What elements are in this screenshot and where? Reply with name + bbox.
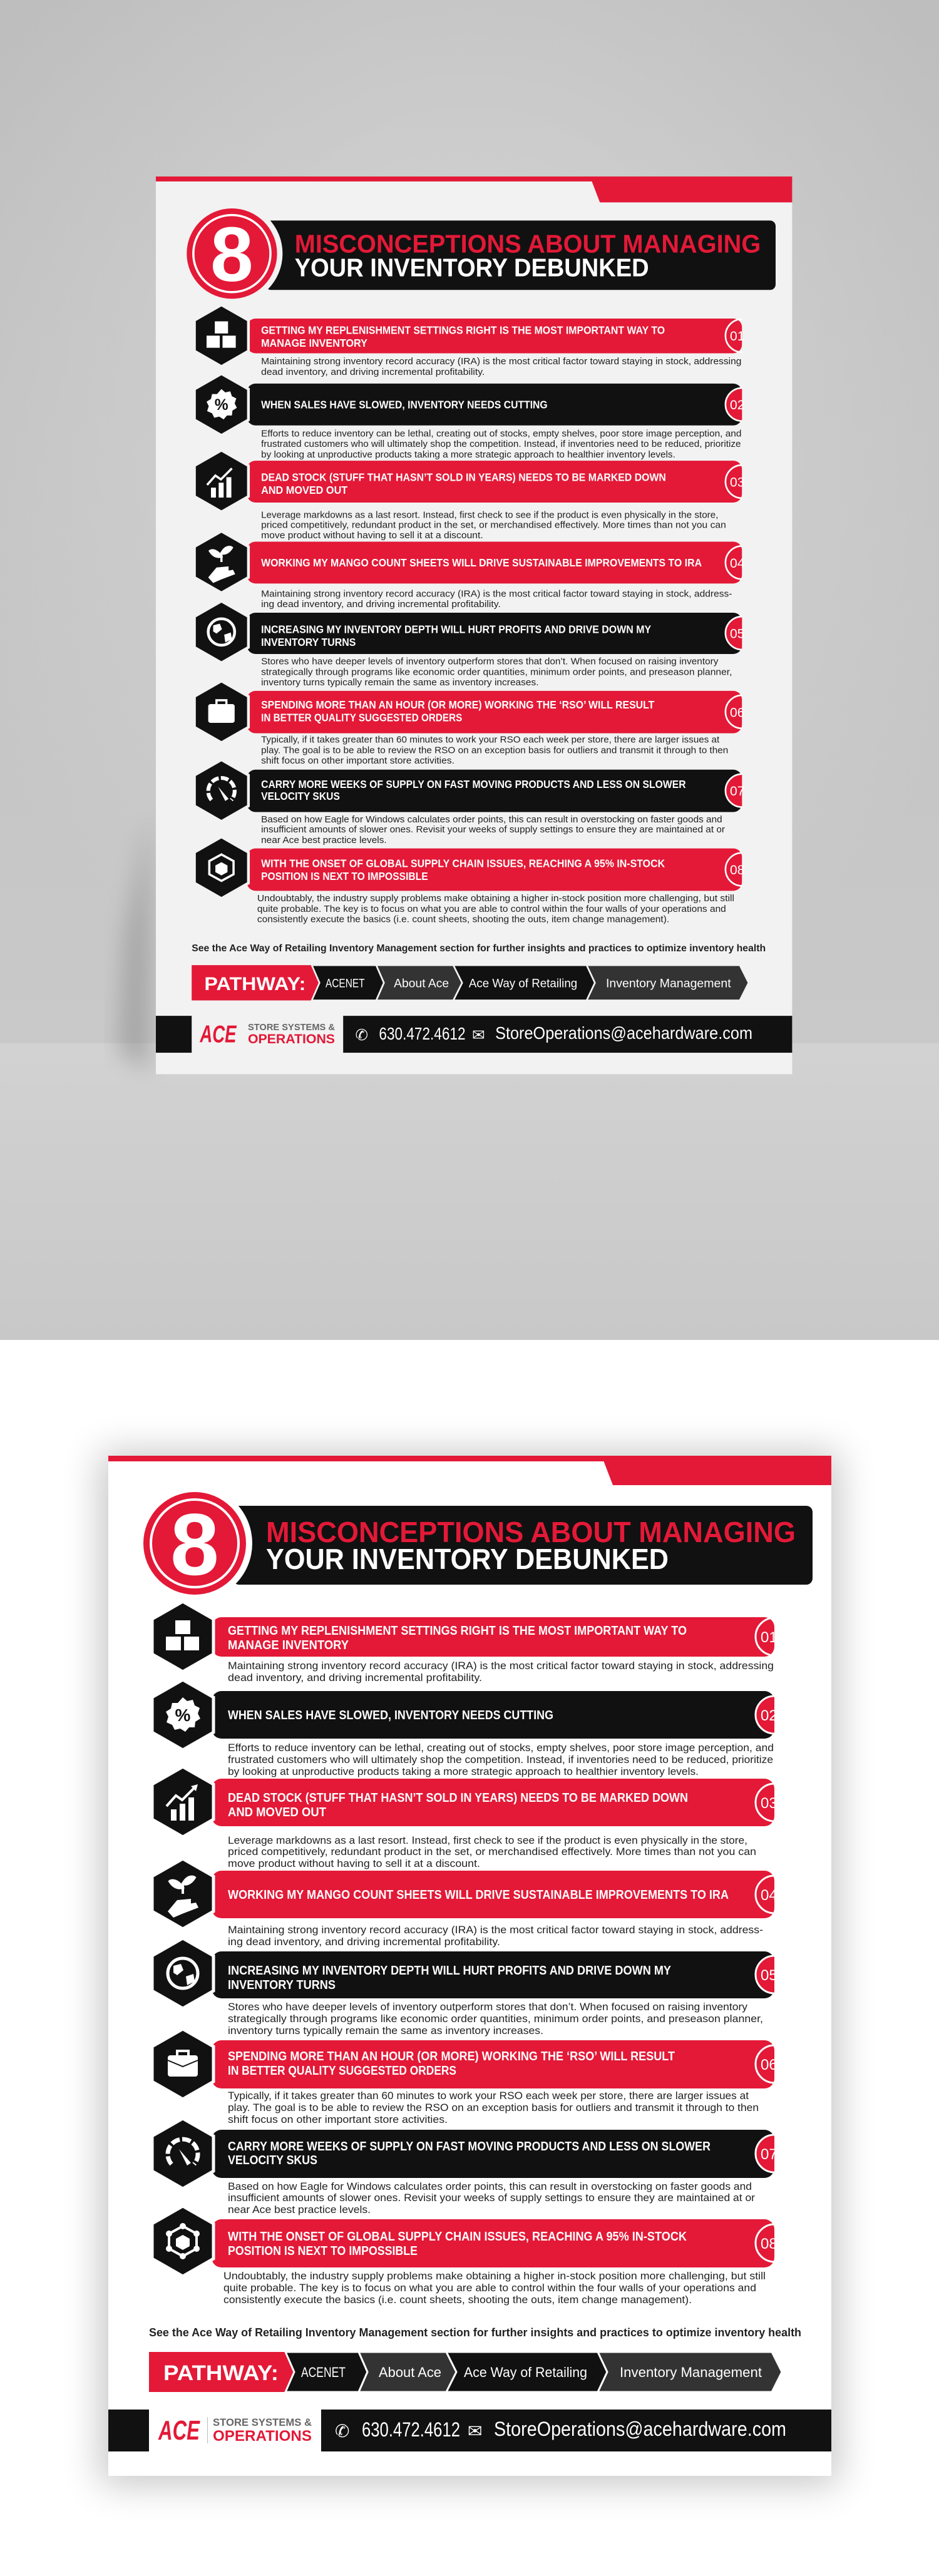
- item 03: move product without having to sell it at a discount.: [228, 1858, 480, 1869]
- item 08: 08: [761, 2236, 777, 2252]
- pathway breadcrumb: Inventory Management: [620, 2364, 762, 2380]
- mockup poster (angled copy): Ace Way of Retailing: [469, 976, 577, 990]
- mockup poster (angled copy): INCREASING MY INVENTORY DEPTH WILL HURT PROFITS AND DRIVE DOWN MY: [261, 623, 651, 636]
- pathway breadcrumb: [149, 2352, 782, 2392]
- title banner with number 8: MISCONCEPTIONS ABOUT MANAGING: [266, 1516, 796, 1548]
- mockup poster (angled copy): StoreOperations@acehardware.com: [495, 1023, 752, 1043]
- mockup poster (angled copy): 01: [730, 329, 744, 344]
- item 07: [152, 2119, 799, 2216]
- footer: logo and contact: STORE SYSTEMS &: [213, 2416, 312, 2428]
- title banner with number 8: 8: [170, 1495, 219, 1593]
- item 08: WITH THE ONSET OF GLOBAL SUPPLY CHAIN ISSUES, REACHING A 95% IN-STOCK: [228, 2230, 687, 2244]
- item 06: IN BETTER QUALITY SUGGESTED ORDERS: [228, 2064, 456, 2078]
- icon: globe: [168, 1958, 198, 1988]
- footer: logo and contact: [108, 2410, 831, 2451]
- item 04: ing dead inventory, and driving incremental profitability.: [228, 1936, 500, 1948]
- mockup poster (angled copy): [156, 176, 792, 1074]
- footer: logo and contact: StoreOperations@acehardware.com: [494, 2418, 786, 2440]
- mockup poster (angled copy): INVENTORY TURNS: [261, 636, 356, 648]
- item 06: shift focus on other important store activities.: [228, 2113, 448, 2125]
- mockup poster (angled copy): WITH THE ONSET OF GLOBAL SUPPLY CHAIN ISSUES, REACHING A 95% IN-STOCK: [261, 857, 665, 870]
- item 07: VELOCITY SKUS: [228, 2154, 317, 2167]
- item 02: [152, 1680, 799, 1777]
- footer: logo and contact: ✆: [335, 2421, 349, 2441]
- mockup poster (angled copy): 03: [730, 475, 744, 489]
- mockup poster (angled copy): ACENET: [326, 976, 365, 990]
- item 01: [152, 1602, 799, 1684]
- mockup poster (angled copy): VELOCITY SKUS: [261, 790, 340, 802]
- mockup poster (angled copy): 02: [730, 398, 744, 412]
- item 05: [152, 1938, 799, 2037]
- item 04: [152, 1859, 799, 1948]
- mockup poster (angled copy): Leverage markdowns as a last resort. Instead, first check to see if the product is even physically in the store,: [261, 510, 718, 521]
- item 08: [152, 2206, 799, 2306]
- item 03: DEAD STOCK (STUFF THAT HASN’T SOLD IN YEARS) NEEDS TO BE MARKED DOWN: [228, 1791, 688, 1805]
- icon: percent badge: %: [175, 1705, 191, 1725]
- mockup poster (angled copy): %: [215, 397, 228, 414]
- icon: percent badge: [166, 1697, 200, 1732]
- item 08: quite probable. The key is to focus on what you are able to control within the four walls of your operations and: [223, 2282, 756, 2294]
- pathway breadcrumb: PATHWAY:: [163, 2361, 279, 2385]
- item 04: Maintaining strong inventory record accuracy (IRA) is the most critical factor toward staying in stock, address-: [228, 1924, 763, 1936]
- mockup poster (angled copy): shift focus on other important store activities.: [261, 755, 454, 766]
- item 03: AND MOVED OUT: [228, 1806, 326, 1819]
- mockup poster (angled copy): move product without having to sell it at a discount.: [261, 530, 483, 541]
- item 07: insufficient amounts of slower ones. Revisit your weeks of supply settings to ensure they are maintained at or: [228, 2192, 755, 2204]
- mockup poster (angled copy): SPENDING MORE THAN AN HOUR (OR MORE) WORKING THE ‘RSO’ WILL RESULT: [261, 698, 655, 711]
- item 01: MANAGE INVENTORY: [228, 1638, 349, 1652]
- mockup poster (angled copy): IN BETTER QUALITY SUGGESTED ORDERS: [261, 711, 463, 723]
- mockup poster (angled copy): STORE SYSTEMS &: [248, 1022, 335, 1033]
- icon: growth chart: [167, 1784, 198, 1821]
- mockup poster (angled copy): POSITION IS NEXT TO IMPOSSIBLE: [261, 870, 428, 882]
- pathway breadcrumb: About Ace: [379, 2364, 441, 2380]
- mockup poster (angled copy): DEAD STOCK (STUFF THAT HASN’T SOLD IN YEARS) NEEDS TO BE MARKED DOWN: [261, 471, 666, 484]
- item 04: 04: [761, 1887, 777, 1904]
- bottom poster shadow: [100, 1452, 839, 2485]
- title banner with number 8: [137, 1486, 813, 1601]
- mockup poster (angled copy): Maintaining strong inventory record accuracy (IRA) is the most critical factor toward staying in stock, addressing: [261, 356, 741, 367]
- item 03: Leverage markdowns as a last resort. Instead, first check to see if the product is even physically in the store,: [228, 1834, 747, 1846]
- icon: boxes: [166, 1620, 199, 1650]
- item 05: 05: [761, 1967, 777, 1984]
- mockup poster (angled copy): WHEN SALES HAVE SLOWED, INVENTORY NEEDS CUTTING: [261, 398, 548, 411]
- mockup poster (angled copy): 630.472.4612: [379, 1024, 466, 1043]
- mockup poster (angled copy): insufficient amounts of slower ones. Revisit your weeks of supply settings to ensure they are maintained at or: [261, 824, 725, 835]
- mockup poster (angled copy): YOUR INVENTORY DEBUNKED: [295, 253, 649, 282]
- mockup poster (angled copy): 04: [730, 556, 745, 571]
- pathway breadcrumb: ACENET: [301, 2364, 346, 2380]
- mockup poster (angled copy): ✉: [472, 1027, 485, 1044]
- mockup poster (angled copy): Efforts to reduce inventory can be lethal, creating out of stocks, empty shelves, poor store image perception, and: [261, 428, 741, 439]
- item 08: consistently execute the basics (i.e. count sheets, shooting the outs, item change management).: [223, 2294, 692, 2306]
- mockup poster (angled copy): Maintaining strong inventory record accuracy (IRA) is the most critical factor toward staying in stock, address-: [261, 588, 732, 599]
- item 06: Typically, if it takes greater than 60 minutes to work your RSO each week per store, there are larger issues at: [228, 2090, 749, 2102]
- mockup poster (angled copy): inventory turns typically remain the same as inventory increases.: [261, 677, 539, 688]
- title banner with number 8: YOUR INVENTORY DEBUNKED: [266, 1543, 669, 1575]
- item 02: WHEN SALES HAVE SLOWED, INVENTORY NEEDS CUTTING: [228, 1709, 553, 1722]
- mockup poster (angled copy): 08: [730, 863, 744, 877]
- item 01: GETTING MY REPLENISHMENT SETTINGS RIGHT IS THE MOST IMPORTANT WAY TO: [228, 1624, 687, 1638]
- item 02: Efforts to reduce inventory can be lethal, creating out of stocks, empty shelves, poor store image perception, and: [228, 1742, 774, 1754]
- footer: logo and contact: OPERATIONS: [213, 2428, 312, 2445]
- item 06: play. The goal is to be able to review the RSO on an exception basis for outliers and transmit it through to then: [228, 2102, 759, 2113]
- mockup poster (angled copy): MISCONCEPTIONS ABOUT MANAGING: [295, 229, 761, 258]
- mockup poster (angled copy): Undoubtably, the industry supply problems make obtaining a higher in-stock position more challenging, but still: [257, 893, 734, 904]
- mockup poster (angled copy): ing dead inventory, and driving incremental profitability.: [261, 599, 501, 610]
- mockup poster (angled copy): ✆: [356, 1027, 368, 1044]
- item 07: CARRY MORE WEEKS OF SUPPLY ON FAST MOVING PRODUCTS AND LESS ON SLOWER: [228, 2140, 711, 2154]
- top red accent bar: [108, 1456, 831, 1485]
- footer: logo and contact: 630.472.4612: [362, 2418, 460, 2441]
- item 07: Based on how Eagle for Windows calculates order points, this can result in overstocking on faster goods and: [228, 2180, 752, 2192]
- item 06: 06: [761, 2057, 777, 2073]
- footer: logo and contact: ACE: [158, 2415, 200, 2446]
- item 06: SPENDING MORE THAN AN HOUR (OR MORE) WORKING THE ‘RSO’ WILL RESULT: [228, 2050, 675, 2063]
- footer: logo and contact: ✉: [468, 2421, 482, 2441]
- mockup poster (angled copy): play. The goal is to be able to review the RSO on an exception basis for outliers and transmit it through to then: [261, 745, 728, 755]
- mockup poster (angled copy): strategically through programs like economic order quantities, minimum order points, and preseason planner,: [261, 667, 732, 677]
- icon: briefcase: [168, 2051, 198, 2077]
- item 08: POSITION IS NEXT TO IMPOSSIBLE: [228, 2244, 418, 2258]
- item 05: INCREASING MY INVENTORY DEPTH WILL HURT PROFITS AND DRIVE DOWN MY: [228, 1964, 672, 1978]
- item 02: 02: [761, 1707, 777, 1724]
- mockup poster (angled copy): 06: [730, 705, 744, 720]
- mockup poster (angled copy): CARRY MORE WEEKS OF SUPPLY ON FAST MOVING PRODUCTS AND LESS ON SLOWER: [261, 778, 686, 790]
- mockup poster (angled copy): Inventory Management: [606, 976, 731, 990]
- item 05: INVENTORY TURNS: [228, 1978, 336, 1992]
- mockup poster (angled copy): OPERATIONS: [248, 1032, 335, 1046]
- item 04: WORKING MY MANGO COUNT SHEETS WILL DRIVE SUSTAINABLE IMPROVEMENTS TO IRA: [228, 1888, 729, 1902]
- mockup poster (angled copy): priced competitively, redundant product in the set, or merchandised effectively. More times than not you can: [261, 519, 726, 530]
- item 05: Stores who have deeper levels of inventory outperform stores that don’t. When focused on raising inventory: [228, 2001, 748, 2013]
- item 05: inventory turns typically remain the same as inventory increases.: [228, 2025, 543, 2037]
- item 01: Maintaining strong inventory record accuracy (IRA) is the most critical factor toward staying in stock, addressing: [228, 1660, 774, 1672]
- mockup poster (angled copy): Typically, if it takes greater than 60 minutes to work your RSO each week per store, there are larger issues at: [261, 735, 720, 745]
- icon: plant in hand: [168, 1877, 198, 1918]
- icon: cube network: [166, 2223, 200, 2259]
- mockup poster (angled copy): See the Ace Way of Retailing Inventory Management section for further insights and practices to optimize inventory health: [192, 943, 766, 954]
- mockup poster (angled copy): WORKING MY MANGO COUNT SHEETS WILL DRIVE SUSTAINABLE IMPROVEMENTS TO IRA: [261, 556, 702, 569]
- item 06: [152, 2029, 799, 2125]
- icon: gauge: [168, 2139, 198, 2165]
- background: mockup wall and floor: [0, 0, 939, 1340]
- item 02: by looking at unproductive products taking a more strategic approach to healthier inventory levels.: [228, 1766, 699, 1777]
- item 03: priced competitively, redundant product in the set, or merchandised effectively. More times than not you can: [228, 1846, 756, 1858]
- footnote text: See the Ace Way of Retailing Inventory Management section for further insights and practices to optimize inventory health: [149, 2326, 801, 2339]
- mockup poster (angled copy): Based on how Eagle for Windows calculates order points, this can result in overstocking on faster goods and: [261, 814, 722, 825]
- mockup poster (angled copy): by looking at unproductive products taking a more strategic approach to healthier inventory levels.: [261, 449, 675, 460]
- item 01: dead inventory, and driving incremental profitability.: [228, 1672, 482, 1684]
- item 05: strategically through programs like economic order quantities, minimum order points, and preseason planner,: [228, 2013, 763, 2025]
- mockup poster (angled copy): 07: [730, 784, 744, 799]
- pathway breadcrumb: Ace Way of Retailing: [464, 2364, 587, 2380]
- mockup poster (angled copy): About Ace: [394, 976, 449, 990]
- mockup poster (angled copy): quite probable. The key is to focus on what you are able to control within the four walls of your operations and: [257, 904, 726, 914]
- mockup poster (angled copy): 8: [210, 212, 254, 298]
- item 03: 03: [761, 1795, 777, 1812]
- mockup poster (angled copy): near Ace best practice levels.: [261, 835, 387, 846]
- mockup poster (angled copy): PATHWAY:: [204, 974, 305, 994]
- mockup poster (angled copy): MANAGE INVENTORY: [261, 337, 367, 349]
- mockup poster (angled copy): 05: [730, 626, 744, 641]
- mockup poster (angled copy): AND MOVED OUT: [261, 484, 347, 496]
- mockup poster (angled copy): consistently execute the basics (i.e. count sheets, shooting the outs, item change management).: [257, 914, 669, 925]
- flat poster: [108, 1456, 831, 2476]
- item 02: frustrated customers who will ultimately shop the competition. Instead, if inventories need to be reduced, prioritize: [228, 1754, 773, 1766]
- mockup poster (angled copy): dead inventory, and driving incremental profitability.: [261, 367, 485, 377]
- mockup poster (angled copy): frustrated customers who will ultimately shop the competition. Instead, if inventories need to be reduced, prioritize: [261, 439, 741, 449]
- mockup poster (angled copy): GETTING MY REPLENISHMENT SETTINGS RIGHT IS THE MOST IMPORTANT WAY TO: [261, 324, 665, 337]
- item 08: Undoubtably, the industry supply problems make obtaining a higher in-stock position more challenging, but still: [223, 2270, 766, 2282]
- mockup poster (angled copy): ACE: [200, 1021, 237, 1048]
- item 01: 01: [761, 1629, 777, 1646]
- mockup poster (angled copy): Stores who have deeper levels of inventory outperform stores that don’t. When focused on raising inventory: [261, 657, 719, 667]
- item 03: [152, 1767, 799, 1869]
- item 07: 07: [761, 2146, 777, 2163]
- item 07: near Ace best practice levels.: [228, 2204, 371, 2216]
